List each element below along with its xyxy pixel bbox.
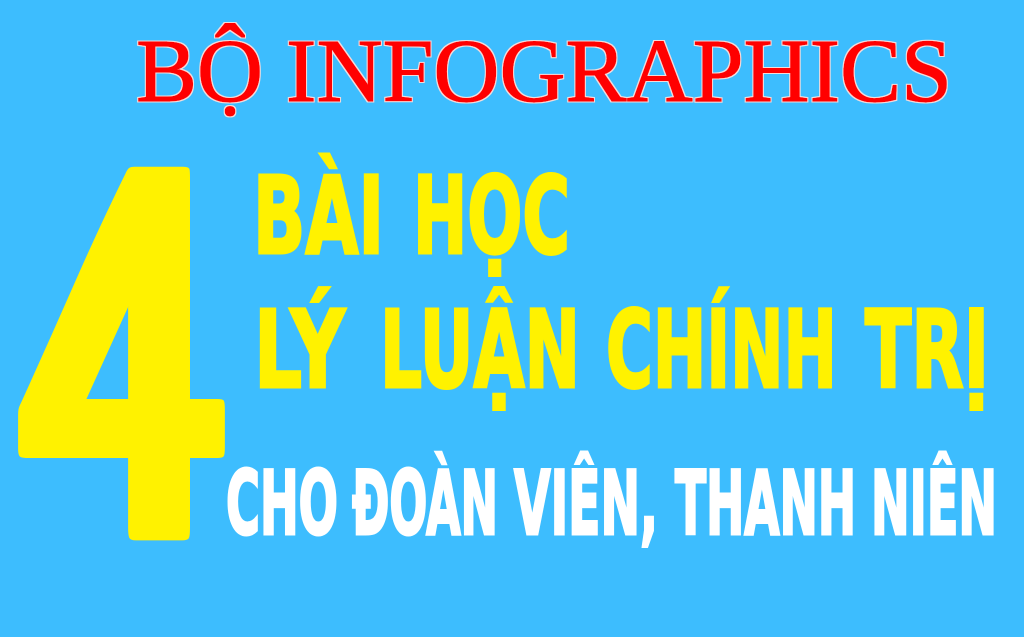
subheading: audience: THANH xyxy=(675,452,856,555)
heading line: bài học: BÀI xyxy=(253,154,384,279)
subheading: audience: CHO xyxy=(226,452,338,555)
heading line: bài học xyxy=(253,154,570,279)
heading line: lý luận chính trị xyxy=(254,287,989,413)
big number 4: 4 xyxy=(19,127,223,607)
subheading: audience: ĐOÀN xyxy=(352,452,498,555)
heading line: lý luận chính trị: CHÍNH xyxy=(606,287,837,413)
title: BỘ INFOGRAPHICS xyxy=(136,22,952,121)
subheading: audience: VIÊN, xyxy=(514,452,658,555)
heading line: lý luận chính trị: LUẬN xyxy=(380,288,580,413)
heading line: lý luận chính trị: LÝ xyxy=(254,287,346,413)
subheading: audience xyxy=(226,452,997,555)
heading line: bài học: HỌC xyxy=(413,155,570,279)
